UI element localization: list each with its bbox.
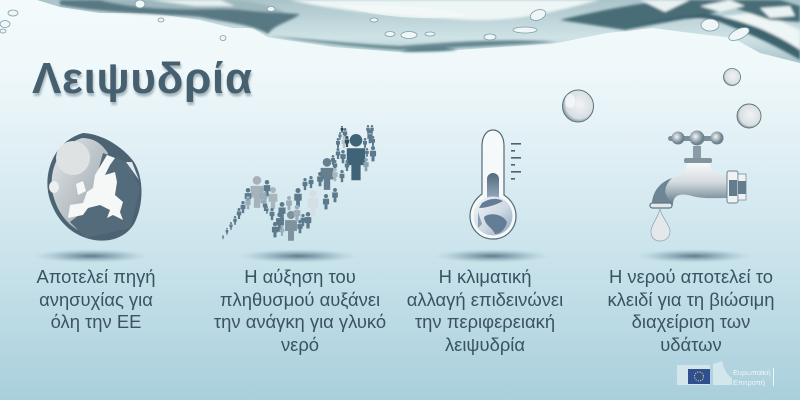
shadow under tap icon: [636, 249, 752, 263]
title: Λειψυδρία: [32, 54, 253, 103]
text: climate change: [407, 266, 563, 355]
text: climate change: την περιφερειακή: [415, 311, 555, 332]
text: water key: Η νερού αποτελεί το: [609, 266, 773, 287]
text: concern for the EU: όλη την ΕΕ: [51, 311, 141, 332]
text: population growth: την ανάγκη για γλυκό: [214, 311, 386, 332]
water surface: [37, 0, 800, 63]
water droplet right: [737, 104, 761, 128]
text: water key: κλειδί για τη βιώσιμη: [607, 289, 774, 310]
text: water key: [607, 266, 774, 355]
shadow under thermometer icon: [434, 249, 550, 263]
text: climate change: αλλαγή επιδεινώνει: [407, 289, 563, 310]
text: concern for the EU: Αποτελεί πηγή: [36, 266, 156, 287]
shadow under Europe icon: [33, 249, 149, 263]
water droplet upper right: [724, 68, 740, 86]
icon: thermometer with globe: [470, 130, 521, 239]
European Commission logo: Επιτροπή: [733, 378, 765, 387]
text: concern for the EU: ανησυχίας για: [39, 289, 153, 310]
icon: water tap with drop: [650, 130, 746, 241]
water droplet large: [562, 90, 594, 122]
text: population growth: πληθυσμού αυξάνει: [220, 289, 380, 310]
text: climate change: λειψυδρία: [445, 334, 525, 355]
shadow under population icon: [238, 249, 358, 263]
text: water key: διαχείριση των: [632, 311, 750, 332]
icon: population growth arrow made of people: [222, 125, 376, 241]
text: water key: υδάτων: [660, 334, 722, 355]
tap drop: [651, 209, 670, 241]
text: climate change: Η κλιματική: [439, 266, 531, 287]
text: population growth: Η αύξηση του: [244, 266, 356, 287]
air bubbles: [0, 0, 751, 43]
text: concern for the EU: [36, 266, 156, 332]
text: population growth: νερό: [281, 334, 319, 355]
icon: Europe in a water drop: [47, 133, 142, 241]
European Commission logo: [677, 361, 774, 387]
European Commission logo: Ευρωπαϊκή: [733, 368, 771, 377]
text: population growth: [214, 266, 386, 355]
thermometer scale: [511, 143, 521, 180]
